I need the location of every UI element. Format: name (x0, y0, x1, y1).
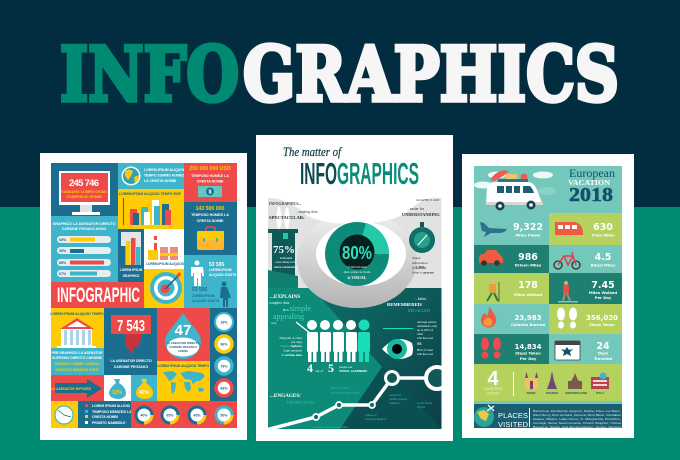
tile: miles walked per day: Miles Walked (589, 290, 617, 295)
icon: teal money bag (104, 375, 131, 401)
panel: people statistic: ALIQUOD ZOUITS (209, 273, 236, 277)
icon: camper van (486, 182, 543, 210)
banner: INFOGRAPHIC (51, 282, 144, 308)
panel: money statistic: TEMPOSO HOMEZI LA (191, 174, 229, 178)
panel: circular gauges: 78% (220, 364, 228, 368)
tile: days travelled: 24 (596, 341, 610, 352)
panel: monitor statistic: COMPENDIO HOMBI (66, 195, 102, 199)
icon: Italy colosseum (591, 372, 609, 389)
icon: luggage (498, 174, 528, 182)
heading: INFOGRAPHICS: GRAPHICS (337, 156, 419, 191)
panel: bank caption: SANCTAO MOMOZA KRUE (55, 368, 99, 372)
tile: calories burned: Calories Burned (511, 322, 545, 327)
panel: 7543 ribbon: LA ASENATOR DIRECTO (110, 359, 152, 363)
pictogram: 4 of 5 people (307, 320, 370, 362)
panel: monitor statistic: 245 746 (69, 178, 99, 189)
panel: money statistic: 250 000 000 USD (189, 166, 231, 172)
text: chart labels: creative visual relevant links (313, 425, 348, 429)
text: better remembered: REMEMBERED/ (387, 302, 423, 307)
panel: world map (157, 361, 210, 401)
illustration: eye poster (268, 198, 442, 429)
panel: water drop 47: 47 (175, 322, 191, 339)
legend: PROMTO NAMBSILE (92, 421, 126, 425)
panel: people statistic: LOREM IPSUM (209, 268, 232, 272)
tile: biked miles: 4.5 (595, 252, 611, 263)
eye: sector (362, 223, 389, 254)
panel: progress bars: GRAPHICO LA ASENATOR DIRECTO (53, 222, 116, 226)
panel: target (144, 269, 184, 308)
panel: globe text: LOREM IPSUM ALIQUOD (144, 168, 186, 172)
panel: donut charts: 65% (166, 414, 174, 418)
tile: miles flown: Miles Flown (515, 232, 541, 238)
eye: pupil (340, 234, 374, 270)
panel: progress bars: 85% (59, 261, 67, 265)
tile: countries visited: ITALY (596, 391, 604, 395)
statistic: 4 out of 5: out of (315, 369, 324, 373)
text: chart labels (313, 386, 433, 429)
tile: driven miles: 986 (518, 252, 538, 263)
panel: globe text (118, 163, 186, 189)
statistic: 4 out of 5: VISUAL LEARNERS (339, 369, 367, 373)
panel: right infographic card (462, 154, 634, 438)
text: chart labels: within targeted (389, 397, 408, 401)
panel: briefcase statistic: CRESTA NOMBI (197, 219, 223, 223)
text: recall statistics: s/he has read (417, 336, 433, 340)
tile: countries visited (474, 364, 622, 401)
text: chart labels: and search engine visits (331, 390, 360, 394)
eye: iris (325, 222, 389, 286)
text: infographics spectacular: SPECTACULAR: (269, 215, 305, 220)
text: recall statistics: up to 20% of (417, 328, 434, 332)
header: European Vacation 2018 (474, 166, 622, 213)
tile: steps taken per day: Per Day (520, 356, 537, 361)
statistic: 4 out of 5 (307, 364, 368, 372)
text: recall statistics: 80% of what (417, 348, 433, 352)
text: better remembered: ...better (415, 297, 427, 301)
text: better remembered: RECALLED (408, 308, 430, 313)
text: infographics spectacular (269, 202, 318, 220)
statistic: 80%: 80% (342, 243, 372, 263)
panel: hat statistic 75%: more convincing (274, 265, 298, 269)
tile: countries visited: 4 (487, 368, 499, 390)
heading: The matter of: The matter of (283, 144, 343, 159)
icon: umbrella (490, 170, 509, 181)
text: diagram note (280, 337, 302, 356)
text: infographics spectacular: ...making data (296, 210, 318, 214)
panel: donut charts (131, 401, 237, 428)
tile: calories burned (474, 304, 549, 334)
tile: biked miles: Biked Miles (591, 262, 616, 268)
panel: bank: LOREM IPSUM ALIQUOD TEMPO (50, 312, 104, 316)
tile: days travelled (549, 334, 622, 364)
panel: people statistic: LOREM IPSUM (192, 294, 215, 298)
legend: LOREM IPSUM ALIJOKI (92, 404, 130, 408)
panel: water drop 47: HOMBI (178, 349, 188, 353)
panel: hat statistic 75%: Indiviuals (280, 256, 293, 260)
panel: progress bars: 67% (59, 272, 67, 276)
lower teal background (268, 288, 382, 429)
text: recall statistics (417, 320, 437, 356)
panel: globe text: TEMPO SUMMO HOMEZI (144, 174, 185, 178)
panel: places visited: Bevagna, Spello, and Montepulciano, Venice, Murano (533, 425, 621, 429)
eye: white (316, 222, 406, 286)
panel: bank caption (51, 348, 104, 375)
panel: people statistic: 53 595 (209, 262, 225, 268)
text: explains: in a simple (283, 304, 311, 313)
panel: hat statistic 75%: 75% (273, 244, 295, 256)
tile: days travelled: Traveled (594, 356, 612, 361)
background: dark navy upper band (0, 0, 680, 207)
text: recall statistics: VS (417, 342, 422, 346)
statistic: 4 out of 5: 5 (328, 361, 334, 375)
text: visual information speed: Visual (412, 256, 420, 260)
icon: eye (382, 339, 413, 359)
text: visual information speed: is 6,000x (412, 266, 426, 270)
text: engages: PROMOTION (287, 400, 315, 405)
text: chart labels: reputation, (389, 393, 402, 398)
panel: circular gauges (210, 308, 237, 401)
panel: circular gauges: 96% (220, 342, 228, 346)
tile: miles flown: 9,322 (513, 222, 543, 233)
tile: train miles (549, 213, 622, 245)
tile: steps taken per day: Steps Taken (515, 350, 541, 356)
text: diagram note: display replaces (280, 344, 303, 348)
statistic: 4 out of 5: people are (339, 365, 353, 369)
panel: water drop 47 (157, 308, 210, 361)
title word: INFO: INFO (60, 30, 239, 118)
tile: miles walked per day: 7.45 (591, 280, 615, 291)
panel: money statistic: CRESTA NOMBI (197, 180, 223, 184)
icon: stopwatch (409, 222, 435, 253)
text: visual information speed (412, 257, 434, 274)
panel: yellow bar chart (118, 189, 184, 229)
panel: 7543 ribbon (104, 308, 157, 375)
tile: train miles: Train Miles (591, 232, 615, 238)
tile: steps taken per day (474, 334, 549, 364)
tile: miles flown (474, 213, 549, 245)
text: visual information speed: information (412, 261, 428, 265)
tile: miles walked (474, 273, 549, 304)
tile: biked miles (549, 245, 622, 273)
text: iris caption: that comes to brain (344, 270, 371, 274)
statistic: 4 out of 5: 4 (307, 361, 313, 375)
panel: people statistic: ALIQUOD ZOUITS (192, 299, 219, 303)
text: iris caption: is VISUAL (348, 275, 367, 280)
tile: calories burned: 23,983 (514, 314, 542, 322)
icon: yellow money bag: 42% (139, 390, 150, 396)
text: graphics easier: UNDERSTANDING (402, 212, 440, 217)
header: European Vacation 2018: VACATION (568, 179, 610, 187)
text: graphics easier: ...easier for (407, 207, 425, 211)
icon: Spain landmark (525, 372, 538, 389)
eye: lid (297, 212, 417, 308)
panel: 7543 ribbon: CARDINE PEGSAKO (114, 365, 148, 369)
panel: donut charts: 40% (140, 414, 148, 418)
panel: progress bars: CARDINE PEGAKO ANGO (62, 227, 106, 231)
panel: bank (50, 308, 104, 348)
panel: circular gauges: 68% (220, 386, 228, 390)
panel: yellow bar chart: LOREM IPSUM ALIQUOD TEMPO ROE (119, 192, 182, 196)
panel: circular gauges: 18% (220, 320, 228, 324)
tile: countries visited: COUNTRIES (484, 387, 502, 391)
text: explains: way (271, 321, 277, 325)
text: graphics easier (402, 199, 440, 216)
text: chart labels: enhanced (365, 413, 377, 417)
panel: factory (144, 229, 185, 269)
tile: train miles: 630 (593, 222, 613, 233)
text: iris caption (344, 265, 371, 280)
text: chart labels: increase traffic (331, 386, 350, 390)
panel: monitor statistic: KANDAHO COMPO ORAIN (61, 190, 107, 194)
panel: world map: LOREM IPSUM ALIQUOD TEMPO (157, 364, 209, 368)
text: chart labels: brand recognition (365, 417, 387, 421)
text: visual information speed: faster to process (412, 270, 435, 274)
text: explains: ...EXPLAINS (270, 294, 300, 300)
tile: countries visited: SWITZERLAND (565, 391, 588, 395)
header: European Vacation 2018: 2018 (569, 184, 613, 206)
panel: people statistic: 53 595 (192, 287, 208, 293)
panel: left infographic card (40, 153, 247, 440)
panel: hat statistic 75% (268, 207, 298, 288)
text: engages: ...ENGAGES/ (270, 393, 301, 399)
text: recall statistics: Average person (417, 320, 437, 324)
icon: clock (51, 401, 78, 428)
panel: bank caption: PER GRAPHICO LA ASENATOR (51, 351, 103, 355)
text: graphics easier: GRAPHICS ARE (416, 198, 440, 202)
text: diagram note: Diagram or chart (279, 336, 302, 340)
panel: bank caption: PEGSAKO ORIME CAMROS (54, 362, 100, 366)
panel: money statistic (184, 163, 237, 202)
panel: places visited: Cornegli, Siena, Sestri Levante, Chianti, Bolgheri, Chieve (533, 421, 621, 425)
glyph: Aa: Aa (383, 309, 410, 334)
panel: progress bars: 35% (59, 249, 67, 253)
text: recall statistics: s/he has read (417, 352, 433, 356)
tile: countries visited: FRANCE (546, 391, 558, 395)
tile: steps taken per day: 14,834 (514, 343, 542, 351)
tile: miles walked per day: Per Day (595, 295, 612, 300)
tile: steps taken: 356,020 (586, 314, 618, 322)
background: teal lower band (0, 207, 680, 460)
pointer (296, 322, 310, 332)
legend: CRESTA NOMBI (92, 415, 118, 419)
panel: water drop 47: LA ASENATOR DIRECTO (166, 341, 200, 345)
text: explains (269, 294, 311, 325)
panel: places visited (474, 404, 622, 429)
panel: places visited: Alsace, Milano, Lake Como, S. Margherita, Portofino, (533, 417, 621, 421)
panel: hat statistic 75%: more likely to be (275, 260, 297, 264)
panel: donut charts: 50% (220, 414, 228, 418)
tile: miles walked: 178 (518, 280, 538, 291)
panel: briefcase statistic: TEMPOSO HOMEZI LA (191, 213, 229, 217)
heading: INFOGRAPHICS: INFO (300, 156, 337, 191)
panel: briefcase statistic: 143 500 000 (196, 206, 225, 212)
icon: yellow money bag (131, 375, 157, 401)
legend (78, 401, 132, 428)
panel: progress bars: 65% (59, 238, 67, 242)
panel: centre infographic card (256, 135, 453, 441)
panel: places visited: Barcelona, Montserrat, Avignon, Hilaire, Arles, Les Baux, (533, 409, 621, 413)
panel: arrow (51, 375, 104, 401)
panel: people statistic (184, 255, 237, 308)
text: engages (270, 394, 314, 404)
text: chart labels: audience (389, 401, 400, 405)
tile: countries visited: SPAIN (527, 391, 535, 395)
panel: blue column chart (118, 229, 144, 282)
panel: money statistic: $ (208, 190, 212, 196)
tile: driven miles: Driven Miles (515, 262, 542, 268)
panel: 7543 ribbon: 7 543 (117, 318, 145, 335)
text: recall statistics: remembers only (417, 324, 437, 328)
text: diagram note: large amounts (283, 348, 303, 352)
tile: driven miles (474, 245, 549, 273)
rule under Aa (383, 328, 413, 329)
panel: water drop 47: CARDINE PEGSAKO (169, 345, 198, 349)
banner: INFOGRAPHIC: INFOGRAPHIC (57, 284, 140, 307)
legend: TEMPOSO MEMIZEZI LA (92, 410, 132, 414)
tile: steps taken: Steps Taken (589, 322, 615, 327)
line chart: growth (262, 367, 448, 431)
title (60, 30, 619, 118)
text: explains: complex data (269, 301, 290, 305)
tile: steps taken (549, 304, 622, 334)
panel: donut charts: 45% (193, 414, 201, 418)
text: infographics spectacular: INFOGRAPHICS... (269, 202, 301, 206)
panel: arrow: LA ASENATOR RIPOSED (51, 387, 92, 391)
icon: teal money bag: 32% (112, 390, 123, 396)
text: chart labels: signals (417, 405, 426, 409)
panel: places visited: PLACES (498, 411, 528, 420)
strip: teal separator (474, 401, 622, 404)
panel: blue column chart: GRAPHICS (123, 274, 139, 278)
panel: bank caption: SUPREMO DIRECTO CARDINE (52, 356, 103, 360)
text: better remembered (387, 297, 430, 313)
text: diagram note: not only (291, 340, 302, 344)
text: explains: appealing (273, 312, 304, 321)
panel: places visited: Saint Remy, Pont du Gard, Geneva, Mont Blanc, Interlaken (533, 413, 621, 417)
panel: progress bars (51, 216, 118, 282)
tile: days travelled: Days (598, 350, 609, 356)
tile: miles walked per day (549, 273, 622, 304)
tile: miles walked: Miles Walked (514, 292, 542, 297)
panel: globe text: LA CRESTA NOMBI (144, 179, 176, 183)
icon: Eiffel tower (547, 371, 557, 389)
icon: Switzerland building (568, 373, 582, 389)
text: iris caption: of information (347, 265, 367, 269)
panel: briefcase statistic (184, 202, 237, 255)
cloud (268, 185, 442, 224)
panel: blue column chart: LOREM IPSUM (120, 268, 143, 272)
panel: places visited: VISITED (498, 420, 529, 429)
text: diagram note: of written data (281, 353, 302, 357)
header: European Vacation 2018: European (569, 168, 615, 180)
text: recall statistics: what (417, 332, 423, 336)
heading: INFOGRAPHICS (300, 156, 419, 191)
panel: monitor statistic (51, 163, 118, 216)
tile: countries visited: VISITED (487, 392, 500, 396)
text: chart labels: social media (417, 401, 433, 405)
panel: factory: LOREM IPSUM ALIQUOD (146, 262, 185, 266)
